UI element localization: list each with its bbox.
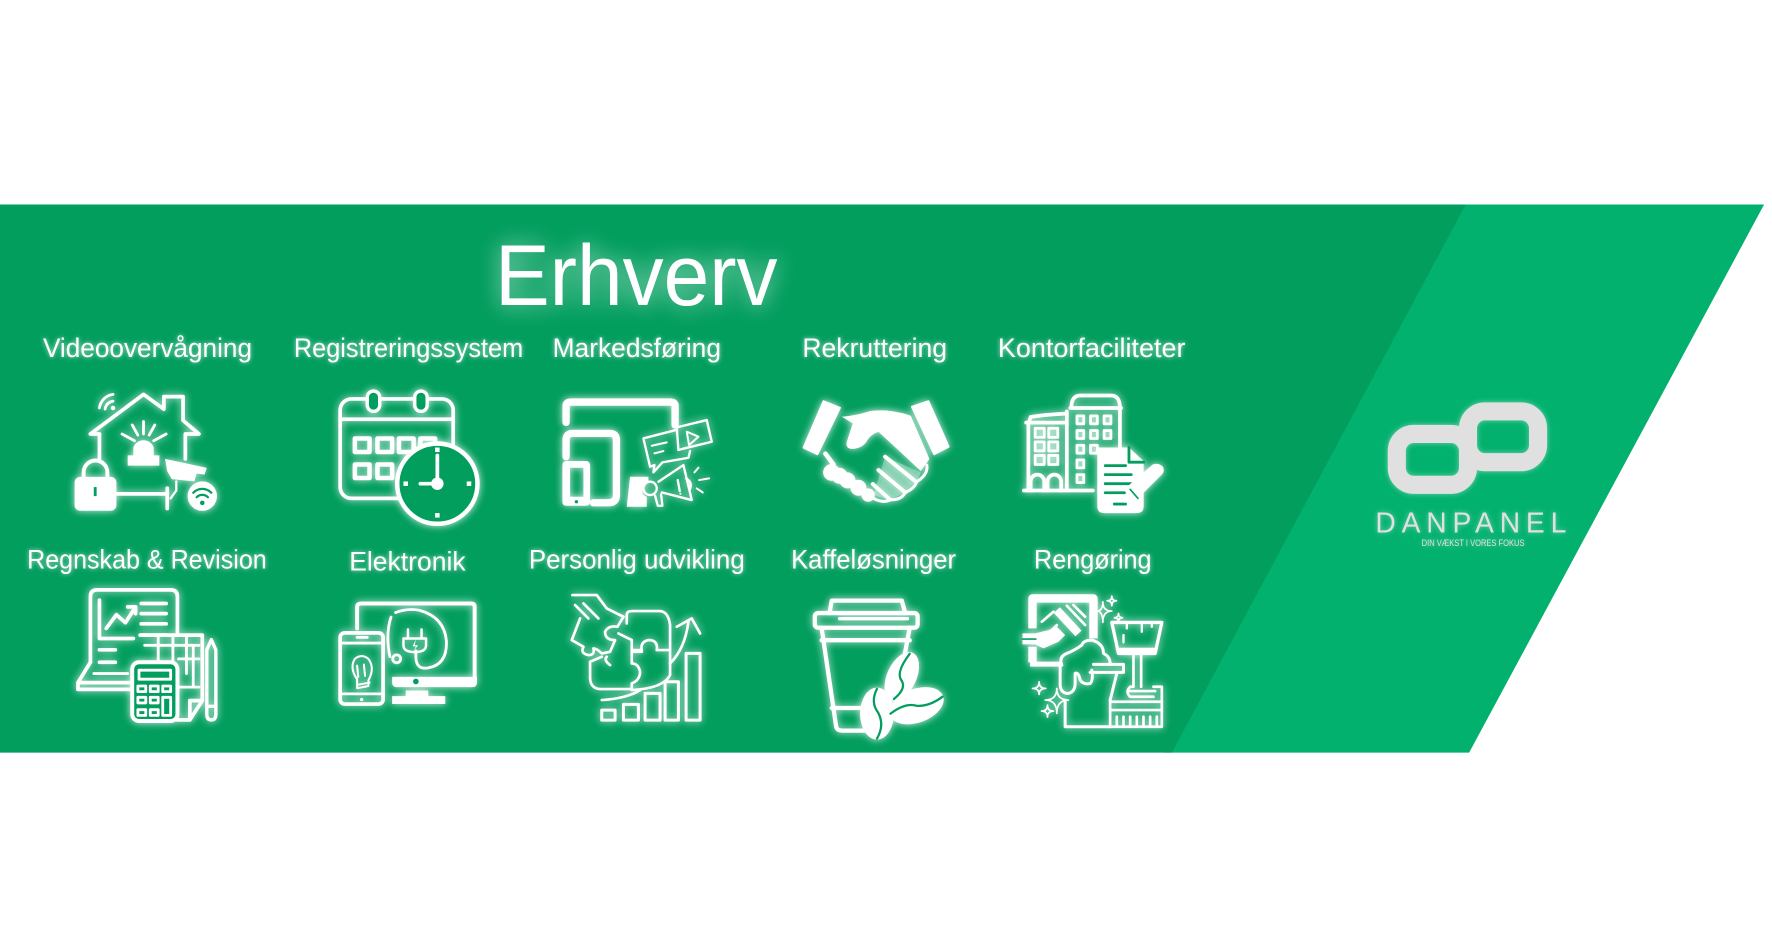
logo tagline: DIN VÆKST I VORES FOKUS bbox=[1422, 538, 1525, 548]
title: Erhverv bbox=[495, 228, 778, 324]
label: Registreringssystem: Registreringssystem bbox=[294, 332, 523, 363]
label: Rekruttering: Rekruttering bbox=[802, 332, 947, 363]
logo: Danpanel bbox=[1375, 411, 1566, 548]
panel: light green parallelogram bbox=[1164, 205, 1764, 753]
label: Videoovervågning: Videoovervågning bbox=[43, 332, 252, 363]
icon: cleaning supplies bbox=[1022, 596, 1162, 727]
label: Markedsføring: Markedsføring bbox=[553, 332, 721, 363]
icon: smart home security bbox=[75, 394, 217, 511]
icon: accounting laptop, sheet, calculator bbox=[78, 590, 216, 721]
logo mark bbox=[1397, 411, 1538, 485]
label: Kaffeløsninger: Kaffeløsninger bbox=[791, 543, 956, 574]
panel: dark green band bbox=[0, 205, 1466, 753]
icon: coffee cup with beans bbox=[815, 601, 949, 740]
icon: handshake bbox=[803, 401, 949, 502]
logo wordmark: DANPANEL bbox=[1375, 506, 1566, 538]
icon: electronics monitor, phone, plug bbox=[340, 603, 477, 704]
label: Rengøring: Rengøring bbox=[1034, 543, 1152, 574]
icon: personal development puzzle and growth bbox=[572, 595, 700, 720]
label: Elektronik: Elektronik bbox=[349, 546, 466, 577]
icon: office buildings with document bbox=[1024, 396, 1164, 513]
icon: digital marketing devices bbox=[562, 402, 712, 507]
label: Regnskab & Revision: Regnskab & Revision bbox=[27, 543, 267, 574]
label: Kontorfaciliteter: Kontorfaciliteter bbox=[998, 332, 1185, 363]
label: Personlig udvikling: Personlig udvikling bbox=[529, 543, 745, 574]
icon: calendar with clock bbox=[340, 391, 477, 524]
